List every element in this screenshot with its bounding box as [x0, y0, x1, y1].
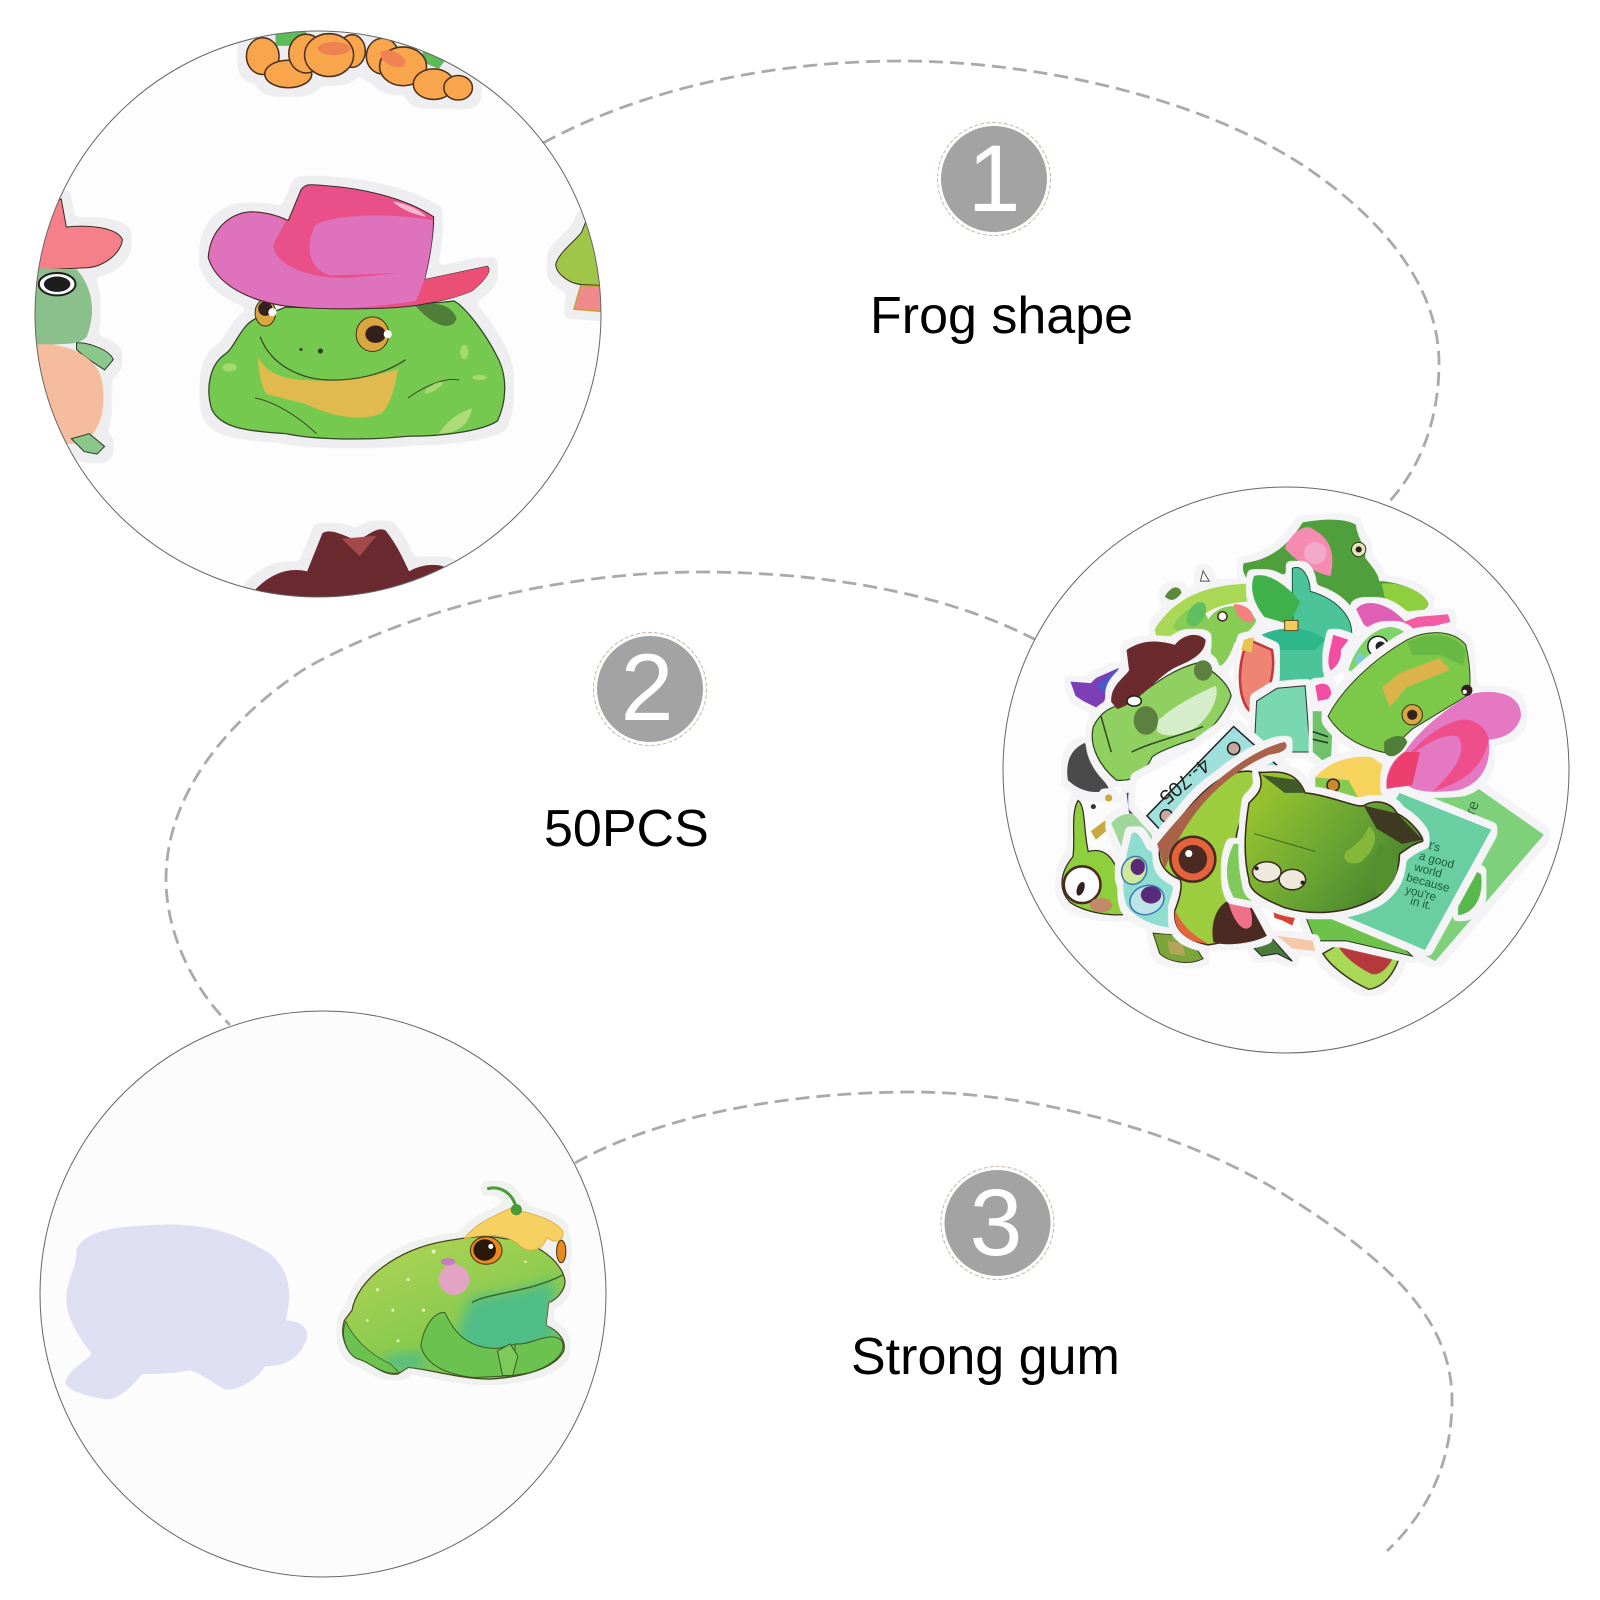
number badge 2: [594, 632, 706, 746]
brown hat toad sticker: [1092, 635, 1231, 780]
frog right eye: [356, 317, 389, 352]
number badge 2: 2: [621, 635, 673, 741]
flower hat frog sticker: [343, 1188, 566, 1379]
mint quote card sticker: you're: [1404, 883, 1438, 904]
mint torn sticker: [1254, 686, 1310, 752]
back green card sticker: re: [1462, 799, 1483, 817]
left partial frog sticker: [26, 199, 122, 454]
bottom partial dark hat sticker: [251, 529, 450, 599]
red round sticker: [1240, 637, 1273, 714]
small green frog sticker: [1305, 910, 1412, 956]
cyan text card sticker: 4-·705: [1155, 753, 1214, 808]
pink hat: [1386, 692, 1521, 792]
dashed connector 1: [543, 61, 1439, 505]
right partial frog sticker: [556, 219, 612, 312]
star specks: [366, 1249, 527, 1342]
dashed connector 3: [575, 1092, 1452, 1551]
teal belly: [383, 1280, 554, 1369]
lavender adhesive backing shape: [65, 1224, 307, 1399]
black round sticker: [1067, 743, 1109, 792]
pink bits sticker: [1315, 635, 1348, 701]
blush: [439, 1264, 469, 1295]
mint quote card sticker: because: [1405, 871, 1451, 895]
twig bits sticker: [1254, 936, 1315, 961]
frog left eye: [255, 299, 276, 326]
mint quote card sticker: in it.: [1409, 894, 1433, 913]
brown-lid big eye frog sticker: [1157, 742, 1287, 945]
label: Frog shape: Frog shape: [870, 287, 1133, 345]
green wide-eye frog sticker: [1062, 794, 1127, 915]
belly-up dark green frog sticker: [1245, 772, 1423, 913]
label: Strong gum: Strong gum: [851, 1328, 1120, 1386]
eye: [470, 1237, 502, 1264]
pink star sticker: [1356, 603, 1451, 640]
teal alien sticker: [1117, 832, 1177, 928]
label: 50PCS: 50PCS: [544, 800, 709, 858]
purple flower sticker: [1070, 668, 1119, 709]
light green ring frog sticker: [1155, 571, 1257, 670]
number badge 3: 3: [970, 1170, 1022, 1276]
big frog with pink hat sticker: [1328, 633, 1521, 792]
mint quote card sticker: [1331, 793, 1491, 950]
mint quote card sticker: world: [1412, 860, 1443, 881]
number badge 1: 1: [968, 126, 1020, 232]
number badge 1: [938, 122, 1050, 236]
pale frog under belly frog: [1227, 844, 1259, 903]
pale green blob sticker: [1111, 790, 1157, 859]
eye frog sticker: [1348, 627, 1410, 676]
yellow flower hat: [464, 1208, 563, 1250]
panel: frog sticker close-up circle: [26, 20, 612, 599]
frog body: [343, 1237, 565, 1379]
red fragments: [1272, 903, 1297, 926]
olive frog sticker: [1153, 933, 1203, 962]
number badge 3: [941, 1166, 1054, 1280]
cowboy hat frog sticker: [208, 185, 505, 439]
teal upside-down frog sticker: [1252, 567, 1352, 688]
mint quote card sticker: It's: [1424, 838, 1442, 855]
frog body: [209, 301, 505, 439]
frog back leg: [344, 1321, 399, 1373]
mint quote card sticker: a good: [1418, 850, 1456, 871]
brown hat: [1111, 635, 1206, 709]
frog arms: [421, 1312, 516, 1378]
panel: pile of 50 stickers circle: [1003, 487, 1569, 1053]
yellow throat: [258, 357, 398, 418]
pink cowboy hat: [208, 185, 489, 309]
cyan text card sticker: [1134, 727, 1285, 859]
dashed connector 2: [166, 572, 1036, 1025]
bottom red sticker: [1323, 943, 1402, 989]
panel: strong gum sticker back circle: [40, 1011, 606, 1577]
orange flower sticker: [246, 20, 472, 100]
dark green frog with pink mouth sticker: [1243, 520, 1429, 615]
yellow flower frog sticker: [1315, 757, 1387, 803]
back green card sticker: [1420, 784, 1550, 966]
frog eyes: [1253, 862, 1281, 882]
small green striped sticker: [1313, 711, 1333, 767]
small frog behind card: [1458, 859, 1482, 915]
